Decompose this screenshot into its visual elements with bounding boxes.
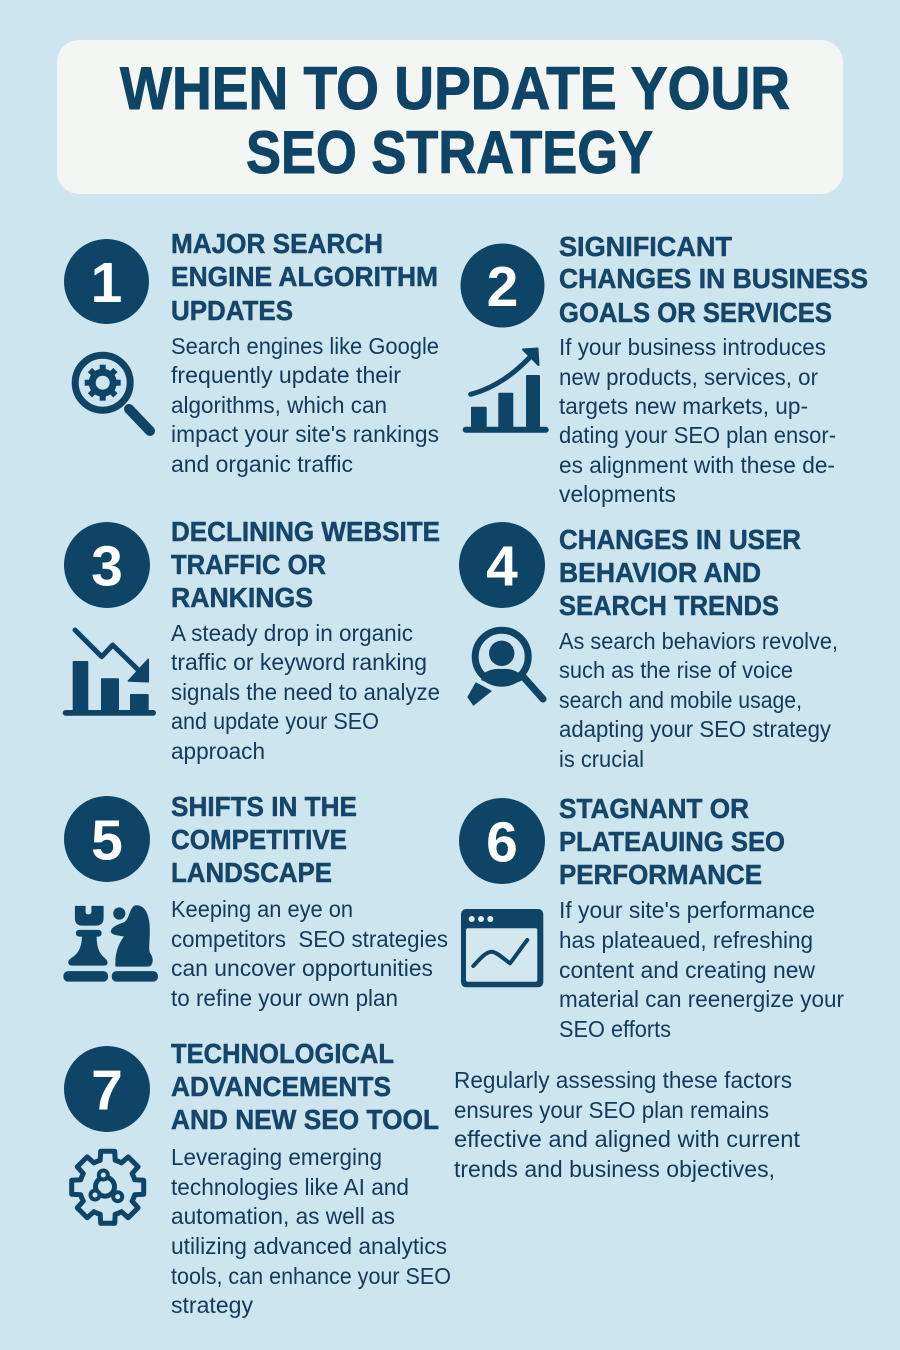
heading 5: SHIFTS IN THE: [171, 791, 357, 822]
body text 4: As search behaviors revolve,: [559, 628, 838, 654]
heading 5: COMPETITIVE: [171, 824, 347, 855]
heading 3: RANKINGS: [171, 582, 313, 613]
body text 3: traffic or keyword ranking: [171, 649, 427, 675]
heading 6: [559, 793, 785, 890]
number badge 4: 4: [486, 534, 518, 598]
body text 6: [559, 897, 844, 1042]
heading 5: [171, 791, 357, 888]
body text 6: material can reenergize your: [559, 986, 844, 1012]
heading 7: AND NEW SEO TOOL: [171, 1104, 439, 1135]
body text 3: [171, 620, 440, 764]
heading 7: TECHNOLOGICAL: [171, 1038, 394, 1069]
panel: 2 significant changes in business goals or services: [460, 231, 868, 507]
heading 4: [559, 524, 801, 621]
heading 4: SEARCH TRENDS: [559, 590, 779, 621]
body text 7: utilizing advanced analytics: [171, 1233, 447, 1259]
body text 4: is crucial: [559, 746, 644, 772]
number badge 6: 6: [486, 810, 518, 874]
heading 7: ADVANCEMENTS: [171, 1071, 391, 1102]
body text 1: impact your site's rankings: [171, 421, 439, 447]
body text 1: [171, 333, 439, 477]
number badge 1: 1: [91, 251, 122, 315]
heading 1: MAJOR SEARCH: [171, 228, 383, 259]
number badge 7: [64, 1046, 150, 1132]
heading 3: TRAFFIC OR: [171, 549, 326, 580]
icon: chess rook and knight: [64, 906, 157, 981]
body text 2: es alignment with these de-: [559, 452, 835, 478]
heading 1: ENGINE ALGORITHM: [171, 261, 438, 292]
heading 2: SIGNIFICANT: [559, 231, 732, 262]
body text 2: targets new markets, up-: [559, 393, 808, 419]
icon: magnifier with user: [468, 630, 543, 705]
title panel: [57, 40, 843, 194]
icon: rising bar chart with arrow: [463, 348, 549, 433]
heading 3: [171, 516, 440, 613]
closing text block: trends and business objectives,: [454, 1156, 775, 1182]
body text 3: approach: [171, 738, 265, 764]
number badge 4: [459, 522, 545, 608]
closing text block: [454, 1067, 801, 1182]
heading 6: PERFORMANCE: [559, 859, 762, 890]
heading 7: [171, 1038, 439, 1135]
body text 1: algorithms, which can: [171, 392, 387, 418]
heading 2: GOALS OR SERVICES: [559, 297, 832, 328]
title: [120, 55, 790, 186]
title: SEO STRATEGY: [246, 119, 653, 186]
number badge 5: [64, 796, 150, 882]
heading 6: PLATEAUING SEO: [559, 826, 785, 857]
heading 5: LANDSCAPE: [171, 857, 332, 888]
panel: 4 changes in user behavior and search trends: [459, 522, 838, 772]
body text 7: Leveraging emerging: [171, 1144, 382, 1170]
body text 6: If your site's performance: [559, 897, 815, 923]
body text 4: search and mobile usage,: [559, 687, 802, 713]
body text 6: SEO efforts: [559, 1016, 671, 1042]
heading 1: UPDATES: [171, 295, 293, 326]
number badge 1: [64, 239, 149, 324]
heading 6: STAGNANT OR: [559, 793, 749, 824]
body text 4: [559, 628, 838, 772]
body text 7: technologies like AI and: [171, 1174, 409, 1200]
body text 1: frequently update their: [171, 362, 401, 388]
body text 4: such as the rise of voice: [559, 657, 793, 683]
panel: 6 stagnant or plateauing seo performance: [459, 793, 844, 1042]
body text 5: can uncover opportunities: [171, 955, 433, 981]
body text 3: signals the need to analyze: [171, 679, 440, 705]
body text 2: new products, services, or: [559, 364, 818, 390]
panel: 1 major search engine algorithm updates: [64, 228, 439, 477]
body text 2: [559, 334, 836, 507]
body text 1: Search engines like Google: [171, 333, 439, 359]
number badge 2: 2: [487, 255, 518, 319]
icon: magnifier with gear: [75, 355, 150, 431]
number badge 2: [460, 244, 544, 328]
body text 2: velopments: [559, 481, 676, 507]
body text 2: If your business introduces: [559, 334, 826, 360]
heading 4: CHANGES IN USER: [559, 524, 801, 555]
body text 6: has plateaued, refreshing: [559, 927, 813, 953]
icon: gear with network nodes: [72, 1151, 144, 1223]
icon: falling bar chart with arrow: [63, 630, 156, 716]
body text 5: to refine your own plan: [171, 985, 398, 1011]
body text 7: strategy: [171, 1292, 253, 1318]
icon: browser window with line chart: [461, 909, 543, 987]
body text 7: [171, 1144, 451, 1318]
title: WHEN TO UPDATE YOUR: [120, 55, 790, 122]
body text 4: adapting your SEO strategy: [559, 716, 831, 742]
closing text block: Regularly assessing these factors: [454, 1067, 792, 1093]
closing text block: ensures your SEO plan remains: [454, 1097, 769, 1123]
number badge 7: 7: [91, 1058, 123, 1122]
panel: 5 shifts in the competitive landscape: [64, 791, 448, 1011]
heading 3: DECLINING WEBSITE: [171, 516, 440, 547]
heading 1: [171, 228, 438, 326]
body text 5: competitors SEO strategies: [171, 926, 448, 952]
body text 7: tools, can enhance your SEO: [171, 1263, 451, 1289]
panel: 3 declining website traffic or rankings: [63, 516, 440, 764]
panel: 7 technological advancements and new seo tool: [64, 1038, 451, 1318]
heading 2: CHANGES IN BUSINESS: [559, 263, 868, 294]
number badge 6: [459, 798, 545, 884]
number badge 3: [64, 522, 150, 608]
number badge 5: 5: [91, 808, 123, 872]
body text 2: dating your SEO plan ensor-: [559, 422, 836, 448]
heading 4: BEHAVIOR AND: [559, 557, 761, 588]
body text 5: Keeping an eye on: [171, 896, 353, 922]
body text 7: automation, as well as: [171, 1203, 395, 1229]
body text 5: [171, 896, 448, 1011]
heading 2: [559, 231, 868, 328]
number badge 3: 3: [91, 534, 123, 598]
body text 6: content and creating new: [559, 957, 815, 983]
body text 3: and update your SEO: [171, 708, 379, 734]
closing text block: effective and aligned with current: [454, 1126, 801, 1152]
body text 1: and organic traffic: [171, 451, 353, 477]
body text 3: A steady drop in organic: [171, 620, 413, 646]
